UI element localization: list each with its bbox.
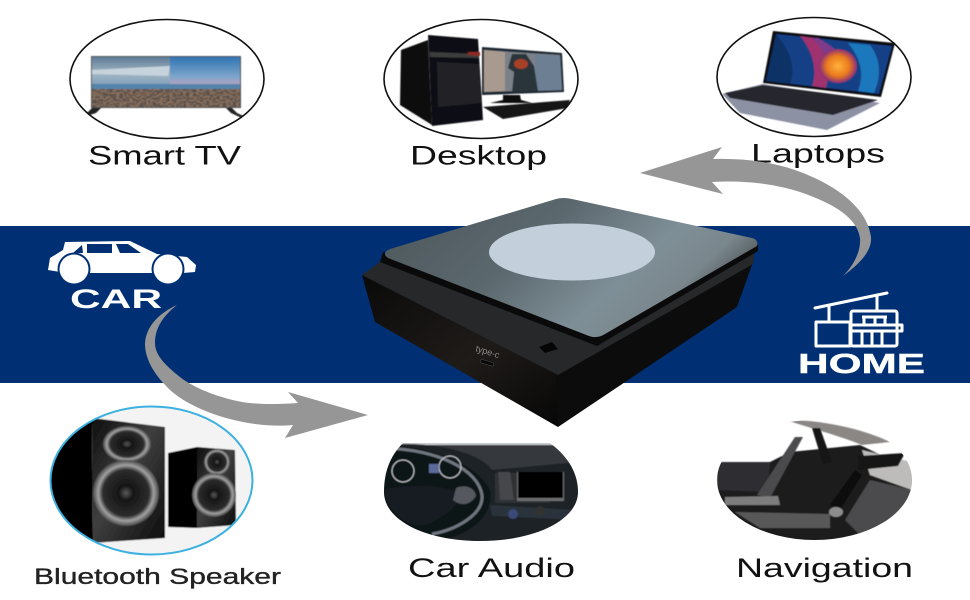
device lid <box>385 198 757 337</box>
laptop photo <box>722 31 895 130</box>
panel: Car Audio <box>380 440 580 583</box>
TV photo <box>87 55 243 118</box>
lid underside shadow <box>380 244 758 346</box>
blue background band <box>0 226 970 383</box>
label: Smart TV: Smart TV <box>88 140 241 170</box>
speaker ellipse outline <box>50 406 252 554</box>
TV ellipse outline <box>70 20 264 138</box>
device lid disc <box>489 224 655 280</box>
icon: home <box>815 293 902 346</box>
laptop ellipse outline <box>717 18 911 136</box>
speaker photo <box>40 406 254 556</box>
arrow: car to speaker <box>145 305 368 438</box>
panel: Navigation <box>717 420 915 583</box>
panel: central device <box>362 198 758 427</box>
label: HOME: HOME <box>798 348 925 379</box>
panel: Desktop <box>384 20 578 170</box>
car dashboard photo <box>380 440 580 545</box>
USB-C port <box>480 359 494 366</box>
label: Car Audio: Car Audio <box>408 553 575 583</box>
desktop photo <box>400 35 570 126</box>
label: Desktop: Desktop <box>410 140 547 170</box>
masked display <box>518 472 563 498</box>
label: CAR: CAR <box>70 284 162 314</box>
icon: car <box>48 241 196 286</box>
device top ledge <box>362 248 755 375</box>
label: Navigation: Navigation <box>736 553 913 583</box>
clip <box>539 342 558 353</box>
device right face <box>556 262 753 427</box>
panel: Laptops <box>717 18 911 168</box>
navigation interior photo <box>717 420 915 545</box>
label: Laptops: Laptops <box>751 138 885 168</box>
desktop ellipse outline <box>384 20 578 138</box>
panel: Smart TV <box>70 20 264 170</box>
panel: Bluetooth Speaker <box>34 406 281 589</box>
label: Bluetooth Speaker: Bluetooth Speaker <box>34 564 281 589</box>
device front face <box>362 275 558 427</box>
port label: type-c: type-c <box>474 343 501 360</box>
arrow: home to laptops <box>640 147 871 276</box>
